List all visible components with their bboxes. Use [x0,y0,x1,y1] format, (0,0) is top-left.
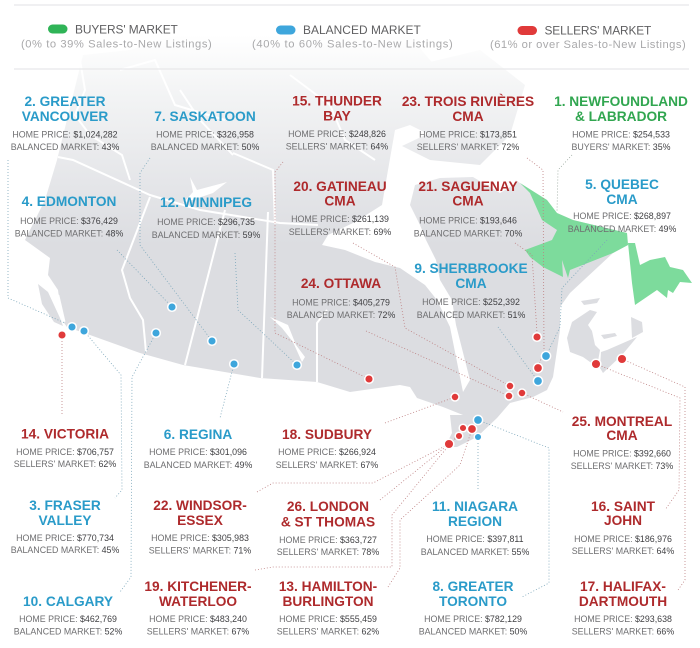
Vancouver Island [38,284,63,326]
4. Edmonton [15,194,123,238]
25. Montreal CMA: 25. MONTREAL [572,414,672,429]
15. Thunder Bay [286,94,388,152]
2. Greater Vancouver: HOME PRICE: $1,024,282 [12,130,118,140]
8. Greater Toronto: HOME PRICE: $782,129 [424,614,522,624]
3. Fraser Valley: 3. FRASER [29,498,101,513]
11. Niagara Region [421,499,529,557]
5. Quebec CMA: 5. QUEBEC [585,177,659,192]
10. Calgary: BALANCED MARKET: 52% [14,626,122,636]
Vancouver Island strait [38,281,64,322]
map of Canada [25,15,692,447]
8. Greater Toronto: TORONTO [439,594,507,609]
21. Saguenay CMA [414,179,522,238]
Baffin Island [402,50,525,165]
17. Halifax-Dartmouth: DARTMOUTH [579,594,667,609]
2. Greater Vancouver [11,94,119,152]
15. Thunder Bay: SELLERS' MARKET: 64% [286,142,388,152]
7. Saskatoon: 7. SASKATOON [154,109,256,124]
Cape Breton [631,317,643,338]
13. Hamilton-Burlington [277,579,379,636]
15. Thunder Bay: BAY [323,108,351,124]
26. London & St Thomas: & ST THOMAS [281,514,375,530]
24. Ottawa: BALANCED MARKET: 72% [287,310,395,320]
22. Windsor-Essex: 22. WINDSOR- [153,498,247,513]
3. Fraser Valley [11,498,119,555]
mainland [25,15,628,447]
6. Regina: BALANCED MARKET: 49% [144,460,252,470]
16. Saint John: HOME PRICE: $186,976 [574,534,672,544]
18. Sudbury [276,427,378,470]
26. London & St Thomas: SELLERS' MARKET: 78% [277,547,379,557]
5. Quebec CMA: BALANCED MARKET: 49% [568,224,676,234]
16. Saint John: JOHN [604,513,642,528]
19. Kitchener-Waterloo: SELLERS' MARKET: 67% [147,626,249,636]
25. Montreal CMA: CMA [606,428,638,443]
19. Kitchener-Waterloo [144,579,252,636]
23. Trois Rivières CMA: CMA [452,109,484,124]
6. Regina [144,427,252,470]
20. Gatineau CMA: HOME PRICE: $261,139 [291,214,389,224]
22. Windsor-Essex [149,498,251,556]
Labrador [520,183,628,278]
Nova Scotia [600,337,637,373]
26. London & St Thomas: 26. LONDON [287,499,369,514]
21. Saguenay CMA: HOME PRICE: $193,646 [419,216,517,226]
11. Niagara Region: 11. NIAGARA [432,499,518,514]
23. Trois Rivières CMA: HOME PRICE: $173,851 [419,130,517,140]
20. Gatineau CMA: 20. GATINEAU [293,179,387,194]
12. Winnipeg: BALANCED MARKET: 59% [152,230,260,240]
10. Calgary: 10. CALGARY [23,594,113,609]
11. Niagara Region: REGION [448,514,502,529]
18. Sudbury: HOME PRICE: $266,924 [278,447,376,457]
26. London & St Thomas: HOME PRICE: $363,727 [279,535,377,545]
11. Niagara Region: HOME PRICE: $397,811 [426,534,524,544]
market dots [58,303,627,449]
20. Gatineau CMA [289,179,391,237]
Anticosti [581,298,600,305]
21. Saguenay CMA: BALANCED MARKET: 70% [414,228,522,238]
9. Sherbrooke CMA: BALANCED MARKET: 51% [417,310,525,320]
20. Gatineau CMA: SELLERS' MARKET: 69% [289,227,391,237]
13. Hamilton-Burlington: HOME PRICE: $555,459 [279,614,377,624]
9. Sherbrooke CMA [414,261,528,320]
6. Regina: 6. REGINA [164,427,232,442]
legend: balanced market: BALANCED MARKET [303,23,421,37]
legend: sellers' market: SELLERS' MARKET [544,24,652,38]
8. Greater Toronto: 8. GREATER [432,579,514,594]
16. Saint John: 16. SAINT [591,499,656,514]
New Brunswick and Gaspe [567,310,600,367]
12. Winnipeg: 12. WINNIPEG [160,195,252,210]
25. Montreal CMA [571,414,673,471]
26. London & St Thomas [277,499,379,557]
17. Halifax-Dartmouth: HOME PRICE: $293,638 [574,614,672,624]
Lake Winnipeg [270,317,305,362]
14. Victoria: SELLERS' MARKET: 62% [14,459,116,469]
Newfoundland [628,243,692,305]
21. Saguenay CMA: 21. SAGUENAY [418,179,518,194]
legend: sellers' market [490,24,686,51]
10. Calgary [14,594,122,636]
23. Trois Rivières CMA: 23. TROIS RIVIÈRES [402,94,534,109]
4. Edmonton: 4. EDMONTON [22,194,116,209]
25. Montreal CMA: SELLERS' MARKET: 73% [571,461,673,471]
17. Halifax-Dartmouth: SELLERS' MARKET: 66% [572,626,674,636]
14. Victoria: HOME PRICE: $706,757 [16,447,114,457]
24. Ottawa [287,276,395,320]
2. Greater Vancouver: BALANCED MARKET: 43% [11,142,119,152]
15. Thunder Bay: HOME PRICE: $248,826 [288,129,386,139]
15. Thunder Bay: 15. THUNDER [292,94,382,108]
12. Winnipeg [152,195,260,240]
17. Halifax-Dartmouth: 17. HALIFAX- [580,579,666,594]
legend: buyers' market: (0% to 39% Sales-to-New Listings) [21,38,212,50]
Great Slave Lake [183,177,227,203]
leader lines [8,155,685,597]
legend: sellers' market: (61% or over Sales-to-New Listings) [490,39,686,51]
1. Newfoundland & Labrador: 1. NEWFOUNDLAND [554,94,688,109]
23. Trois Rivières CMA: SELLERS' MARKET: 72% [417,142,519,152]
8. Greater Toronto: BALANCED MARKET: 50% [419,626,527,636]
22. Windsor-Essex: ESSEX [177,513,224,528]
5. Quebec CMA [568,177,676,234]
10. Calgary: HOME PRICE: $462,769 [19,614,117,624]
1. Newfoundland & Labrador: & LABRADOR [575,109,667,124]
Prince Edward Island [601,333,617,339]
8. Greater Toronto [419,579,527,636]
24. Ottawa: 24. OTTAWA [301,276,381,291]
1. Newfoundland & Labrador: HOME PRICE: $254,533 [572,130,670,140]
23. Trois Rivières CMA [402,94,534,152]
2. Greater Vancouver: VANCOUVER [22,109,108,124]
17. Halifax-Dartmouth [572,579,674,636]
legend: balanced market: (40% to 60% Sales-to-New Listings) [252,38,453,50]
4. Edmonton: BALANCED MARKET: 48% [15,228,123,238]
16. Saint John [572,499,674,556]
7. Saskatoon [151,109,259,152]
18. Sudbury: SELLERS' MARKET: 67% [276,460,378,470]
18. Sudbury: 18. SUDBURY [282,427,372,442]
14. Victoria [14,426,116,469]
13. Hamilton-Burlington: SELLERS' MARKET: 62% [277,626,379,636]
Hudson Bay [322,100,520,392]
13. Hamilton-Burlington: BURLINGTON [282,594,374,609]
3. Fraser Valley: BALANCED MARKET: 45% [11,545,119,555]
4. Edmonton: HOME PRICE: $376,429 [20,216,118,226]
16. Saint John: SELLERS' MARKET: 64% [572,546,674,556]
2. Greater Vancouver: 2. GREATER [24,94,106,109]
14. Victoria: 14. VICTORIA [21,426,109,442]
13. Hamilton-Burlington: 13. HAMILTON- [279,579,378,594]
1. Newfoundland & Labrador [554,94,688,152]
21. Saguenay CMA: CMA [452,194,484,208]
7. Saskatoon: BALANCED MARKET: 50% [151,142,259,152]
5. Quebec CMA: HOME PRICE: $268,897 [573,211,671,221]
22. Windsor-Essex: SELLERS' MARKET: 71% [149,546,251,556]
9. Sherbrooke CMA: CMA [455,276,487,291]
9. Sherbrooke CMA: 9. SHERBROOKE [414,261,528,276]
6. Regina: HOME PRICE: $301,096 [149,447,247,457]
1. Newfoundland & Labrador: BUYERS' MARKET: 35% [571,142,671,152]
19. Kitchener-Waterloo: HOME PRICE: $483,240 [149,614,247,624]
provincial borders [58,60,375,382]
legend rules [14,5,689,69]
11. Niagara Region: BALANCED MARKET: 55% [421,547,529,557]
3. Fraser Valley: HOME PRICE: $770,734 [16,533,114,543]
legend: buyers' market: BUYERS' MARKET [75,22,178,36]
24. Ottawa: HOME PRICE: $405,279 [292,298,390,308]
25. Montreal CMA: HOME PRICE: $392,660 [573,448,671,458]
5. Quebec CMA: CMA [606,192,638,207]
3. Fraser Valley: VALLEY [39,513,91,528]
7. Saskatoon: HOME PRICE: $326,958 [156,130,254,140]
9. Sherbrooke CMA: HOME PRICE: $252,392 [422,297,520,307]
legend: buyers' market [21,22,212,50]
20. Gatineau CMA: CMA [324,194,356,208]
19. Kitchener-Waterloo: WATERLOO [159,594,237,609]
22. Windsor-Essex: HOME PRICE: $305,983 [151,533,249,543]
legend: balanced market [252,23,453,50]
19. Kitchener-Waterloo: 19. KITCHENER- [144,579,252,594]
12. Winnipeg: HOME PRICE: $296,735 [157,217,255,227]
